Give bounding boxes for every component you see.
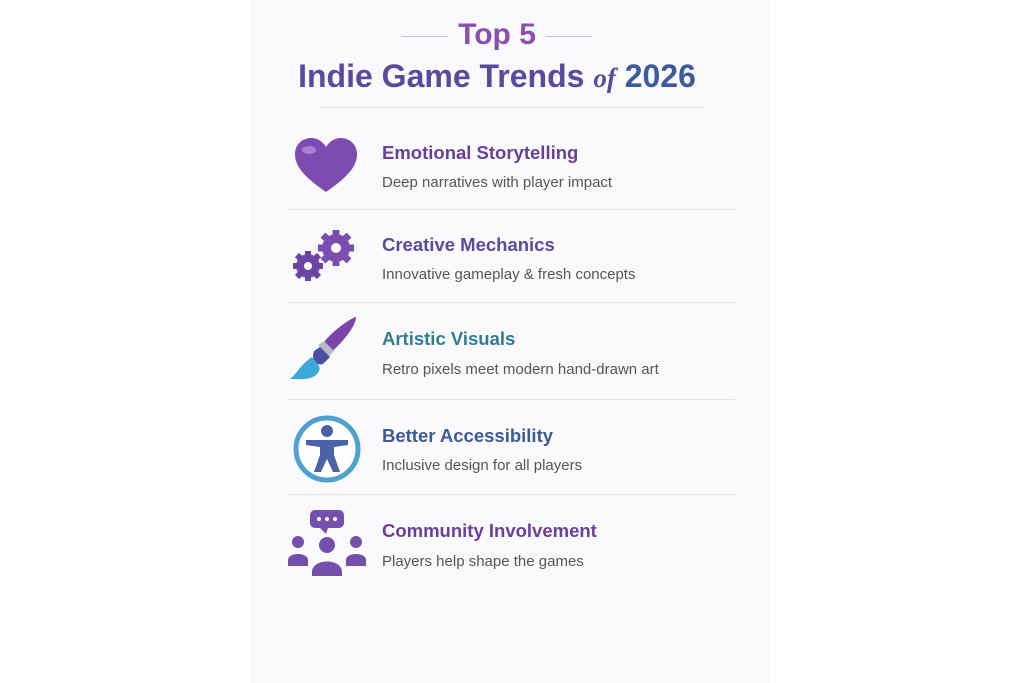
heading: Emotional Storytelling: Emotional Storytelling: [382, 142, 578, 163]
icon: heart: [295, 138, 357, 192]
title line 2: Indie Game Trends of 2026: [298, 58, 696, 94]
icon: community: [288, 510, 366, 576]
item 1: emotional storytelling: [295, 138, 357, 192]
sub: Retro pixels: Retro pixels meet modern hand-drawn art: [382, 361, 659, 378]
icon: paintbrush: [290, 317, 356, 380]
sub: Players help: Players help shape the games: [382, 553, 584, 570]
icon: gears: [293, 230, 354, 281]
title line 1: Top 5: Top 5: [458, 18, 536, 51]
heading: Artistic Visuals: Artistic Visuals: [382, 328, 515, 349]
title: [298, 18, 696, 94]
heading: Creative Mechanics: Creative Mechanics: [382, 234, 555, 255]
heading: Better Accessibility: Better Accessibility: [382, 425, 553, 446]
heading: Community Involvement: Community Involvement: [382, 520, 597, 541]
sub: Deep narratives: Deep narratives with player impact: [382, 174, 612, 191]
sub: Inclusive design: Inclusive design for all players: [382, 457, 582, 474]
icon: accessibility: [294, 416, 360, 482]
sub: Innovative gameplay: Innovative gameplay & fresh concepts: [382, 266, 635, 283]
